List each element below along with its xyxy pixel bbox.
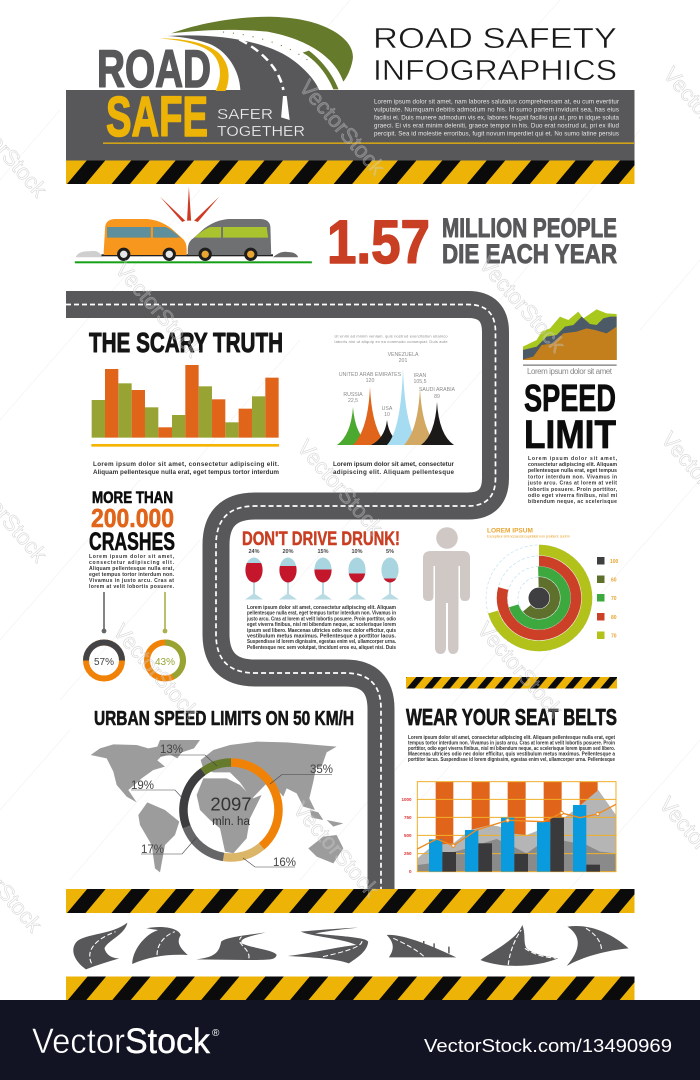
mountain chart: VENEZUELA <box>388 352 419 358</box>
text: seat belts: porttitor, odio eget viverra finibus, nisl mi bibendum neque, ac scelerisque lorem ipsum sed libero. <box>408 746 615 752</box>
text: seat belts: tempus tortor interdum non. Vivamus in justo arcu. Cras at lorem at velit lobortis posuere. Proin <box>408 740 615 746</box>
title: ROAD SAFETY <box>373 23 617 55</box>
statistic caption: DIE EACH YEAR <box>442 239 617 269</box>
text: don't drive drunk <box>246 605 397 651</box>
wine glasses: 10% <box>351 549 363 555</box>
footer bar <box>0 1000 700 1080</box>
area chart caption: Lorem ipsum dolor sit amet <box>527 367 613 376</box>
header text block: percipit. Sea id molestie erroribus, fugit novum imperdiet qui et. No sumo latine persius <box>374 130 619 138</box>
text: crashes: Vivamus in justo arcu. Cras at <box>89 578 174 584</box>
text: speed limit <box>527 456 618 505</box>
donut labels and leader lines: 16% <box>273 857 296 869</box>
donut: 43%: 43% <box>155 657 175 668</box>
wine glasses: 20% <box>282 549 294 555</box>
combo chart <box>417 782 616 872</box>
text: speed limit: odio eget viverra finibus, nisl mi <box>528 493 618 499</box>
logo text: safe: SAFE <box>106 85 208 149</box>
icon: person <box>423 527 470 654</box>
text: speed limit: Lorem ipsum dolor sit amet, <box>528 456 618 462</box>
text: seat belts: porttitor lacus. Suspendisse id lorem dignissim, egestas enim vel, ullamcorper urna. Pellentesque <box>408 757 615 763</box>
radial chart heading <box>487 528 570 538</box>
mountain chart: laboris nisi ut aliquip ex ea commodo consequat. Duis aute <box>334 339 448 344</box>
watermarks: VectorStock <box>294 75 391 181</box>
combo chart axis labels: 250 <box>404 851 412 856</box>
bar chart <box>91 365 279 447</box>
text: don't drive drunk: ipsum sed libero. Maecenas ultricies odio nec dolor efficitur, quis <box>247 628 396 634</box>
logo road graphic <box>160 17 353 120</box>
statistic caption: MILLION PEOPLE <box>442 213 617 243</box>
radial chart legend: 60 <box>611 578 617 584</box>
text: speed limit: pellentesque nulla erat, eget tempus <box>528 468 617 474</box>
wine glasses: 5% <box>386 549 394 555</box>
text: speed limit: consectetur adipiscing elit. Aliquam <box>528 462 617 468</box>
mountain chart: 105,5 <box>414 379 427 385</box>
donut: 57%: 57% <box>94 657 114 668</box>
watermarks: VectorStock <box>474 252 571 358</box>
text: don't drive drunk: Pellentesque nec sem volutpat, tincidunt eros eu, aliquet nisi. Duis <box>247 645 396 651</box>
text: crashes: consectetur adipiscing elit. <box>89 560 175 566</box>
text: crashes <box>89 554 175 590</box>
mountain chart: 89 <box>434 394 440 400</box>
wine glasses: 15% <box>317 549 329 555</box>
mountain chart: 22,5 <box>348 398 358 404</box>
mountain chart: UNITED ARAB EMIRATES <box>339 372 402 378</box>
text: scary truth: Lorem ipsum dolor sit amet, consectetur adipiscing elit. <box>93 461 279 468</box>
combo chart axis labels <box>401 797 412 874</box>
donut labels and leader lines: 13% <box>160 744 183 756</box>
text: scary truth: Aliquam pellentesque nulla erat, eget tempus tortor interdum <box>93 469 279 476</box>
heading: more than 200.000 crashes <box>89 489 175 556</box>
heading: urban speed limits: URBAN SPEED LIMITS ON 50 KM/H <box>94 708 354 730</box>
wine glasses <box>245 549 399 600</box>
donut labels and leader lines <box>131 744 333 869</box>
mountain chart: IRAN <box>414 373 426 379</box>
mountain chart: USA <box>382 406 393 412</box>
tagline: TOGETHER <box>217 123 305 140</box>
footer logo <box>32 1022 220 1061</box>
road icons row <box>73 923 629 969</box>
watermarks: VectorStock <box>110 257 207 363</box>
text: speed limit: lobortis posuere. Proin porttitor, <box>528 487 618 493</box>
combo chart axis labels: 500 <box>404 833 412 838</box>
hazard stripe: top <box>66 160 634 184</box>
combo chart axis labels: 0 <box>409 869 412 874</box>
tagline <box>217 106 305 140</box>
donut chart <box>164 743 298 877</box>
header band <box>66 90 634 161</box>
footer url: VectorStock.com/13490969 <box>424 1035 672 1056</box>
world map <box>91 740 343 872</box>
text: speed limit: tortor interdum non. Vivamus in <box>528 474 617 480</box>
radial chart legend: 100 <box>610 559 619 565</box>
radial chart legend: 80 <box>611 615 617 621</box>
heading: speed limit: SPEED <box>524 378 616 420</box>
hazard stripe: middle <box>66 889 634 913</box>
mountain chart <box>334 334 456 445</box>
heading: the scary truth: THE SCARY TRUTH <box>89 327 283 358</box>
tagline: SAFER <box>217 106 273 123</box>
text: mountain chart: Lorem ipsum dolor sit amet, consectetur <box>333 461 455 468</box>
text: mountain chart <box>333 461 455 476</box>
text: scary truth <box>93 461 279 476</box>
header text block <box>374 98 620 138</box>
footer logo: Vector <box>32 1022 125 1061</box>
heading: wear your seat belts: WEAR YOUR SEAT BELTS <box>406 704 617 730</box>
text: speed limit: bibendum neque, ac scelerisque <box>528 499 617 505</box>
mountain chart: SAUDI ARABIA <box>419 387 456 393</box>
heading: more than 200.000 crashes: MORE THAN <box>92 489 173 507</box>
statistic caption <box>442 213 617 269</box>
donut centre value <box>210 794 252 828</box>
watermarks: VectorStock <box>292 435 389 541</box>
text: mountain chart: adipiscing elit. Aliquam pellentesque <box>333 469 454 476</box>
footer logo: Stock <box>125 1022 210 1061</box>
text: don't drive drunk: pellentesque nulla erat, eget tempus tortor interdum non. Vivamus in <box>247 611 396 617</box>
radial chart heading: LOREM IPSUM <box>487 528 533 534</box>
combo chart axis labels: 1000 <box>401 797 412 802</box>
watermarks: VectorStock <box>472 617 569 723</box>
combo chart axis labels: 750 <box>404 815 412 820</box>
text: don't drive drunk: vestibulum metus maximus. Pellentesque a porttitor lacus. <box>247 634 396 640</box>
title: INFOGRAPHICS <box>373 55 617 87</box>
text: don't drive drunk: Suspendisse id lorem dignissim, egestas enim vel, ullamcorper urna. <box>247 639 396 645</box>
radial chart legend: 70 <box>611 596 617 602</box>
text: crashes: eget tempus tortor interdum non. <box>89 572 175 578</box>
radial chart legend: 70 <box>611 634 617 640</box>
heading: speed limit <box>524 378 616 457</box>
donut centre value: mln. ha <box>212 816 250 828</box>
text: seat belts <box>408 735 616 763</box>
mountain chart: Ut enim ad minim veniam, quis nostrud exercitation ullamco <box>334 334 448 338</box>
text: don't drive drunk: eget viverra finibus, nisl mi bibendum neque, ac scelerisque lorem <box>247 622 396 628</box>
donut: 43% <box>147 592 183 678</box>
watermarks: VectorStock <box>108 619 205 725</box>
radial chart heading: Excepteur sint occaecat cupidatat non proident, sunt in <box>487 534 570 538</box>
radial chart <box>486 545 592 651</box>
heading: don't drive drunk: DON'T DRIVE DRUNK! <box>242 528 400 550</box>
donut labels and leader lines: 35% <box>310 764 333 776</box>
text: don't drive drunk: justo arcu. Cras at lorem at velit lobortis posuere. Proin porttitor, odio <box>246 616 397 622</box>
header yellow rule <box>103 142 634 144</box>
mountain chart: 120 <box>366 378 374 384</box>
watermarks: VectorStock <box>288 797 385 903</box>
mountain chart: 10 <box>384 412 390 418</box>
text: seat belts: Lorem ipsum dolor sit amet, consectetur adipiscing elit. Aliquam pellentesque nulla erat, eget <box>408 735 615 741</box>
donut labels and leader lines: 19% <box>131 780 154 792</box>
mountain chart: 201 <box>399 358 407 364</box>
hazard stripe: bottom <box>66 976 634 1001</box>
mountain chart: RUSSIA <box>343 392 363 398</box>
wine glasses: 24% <box>248 549 260 555</box>
header text block: graeci. Ei vis erat minim deleniti, graece tempor in his. Duo erat nostrud ut, pri ex illud <box>374 122 620 130</box>
heading: more than 200.000 crashes: 200.000 <box>91 503 174 533</box>
header text block: Lorem ipsum dolor sit amet, nam labores salutatus comprehensam at, eu cum evertitur <box>374 98 619 106</box>
text: crashes: lorem at velit lobortis posuere. <box>89 584 175 590</box>
text: don't drive drunk: Lorem ipsum dolor sit amet, consectetur adipiscing elit. Aliquam <box>247 605 396 611</box>
statistic: 1.57: 1.57 <box>327 208 430 276</box>
footer logo: ® <box>212 1028 220 1039</box>
text: speed limit: justo arcu. Cras at lorem at velit <box>527 481 617 487</box>
title <box>373 23 617 87</box>
winding road <box>66 304 496 889</box>
donut centre value: 2097 <box>210 794 252 814</box>
crash illustration <box>75 187 312 263</box>
text: crashes: Aliquam pellentesque nulla erat, <box>89 566 175 572</box>
heading: more than 200.000 crashes: CRASHES <box>89 528 175 556</box>
header text block: vulputate. Numquam debitis admodum no his. Id sumo partem invidunt sea, has eius <box>374 106 619 114</box>
heading: speed limit: LIMIT <box>524 413 616 457</box>
text: crashes: Lorem ipsum dolor sit amet, <box>89 554 175 560</box>
text: seat belts: Maecenas ultricies odio nec dolor efficitur, quis vestibulum metus maximus. Pellentesque a <box>408 752 616 758</box>
hazard stripe: small <box>406 677 617 688</box>
logo text: road: ROAD <box>97 40 211 99</box>
donut labels and leader lines: 17% <box>141 844 164 856</box>
donut: 57% <box>86 592 122 678</box>
area chart <box>523 309 617 366</box>
radial chart legend <box>597 557 619 640</box>
header text block: facilisi ei. Duis munere admodum vis ex, labores feugait facilisi qui at, pro in idque soluta <box>374 114 620 122</box>
